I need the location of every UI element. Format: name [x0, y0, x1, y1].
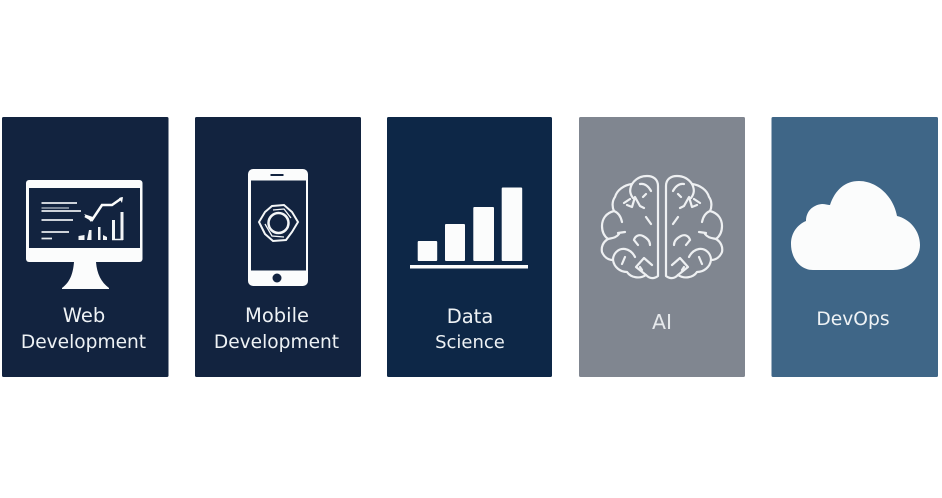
label: web development: Development [21, 332, 146, 353]
label: data science: Data [447, 305, 493, 328]
icon: bar chart [410, 188, 528, 268]
panel: ai [579, 117, 745, 377]
icon: brain [602, 176, 722, 278]
label: mobile development: Development [214, 332, 339, 353]
panel: devops [772, 117, 938, 377]
label: mobile development: Mobile [245, 304, 309, 327]
label: mobile development [214, 304, 339, 353]
label: web development: Web [63, 304, 105, 327]
panel: mobile development [195, 117, 361, 377]
label: devops: DevOps [816, 309, 890, 330]
icon: smartphone with gear [248, 169, 308, 286]
label: data science: Science [435, 332, 505, 353]
label: web development [21, 304, 146, 353]
label: ai: AI [652, 310, 672, 334]
panel: data science [387, 117, 552, 377]
icon: cloud [791, 181, 920, 270]
icon: desktop monitor with charts [26, 180, 142, 289]
panel: web development [2, 117, 168, 377]
label: data science [435, 305, 505, 353]
